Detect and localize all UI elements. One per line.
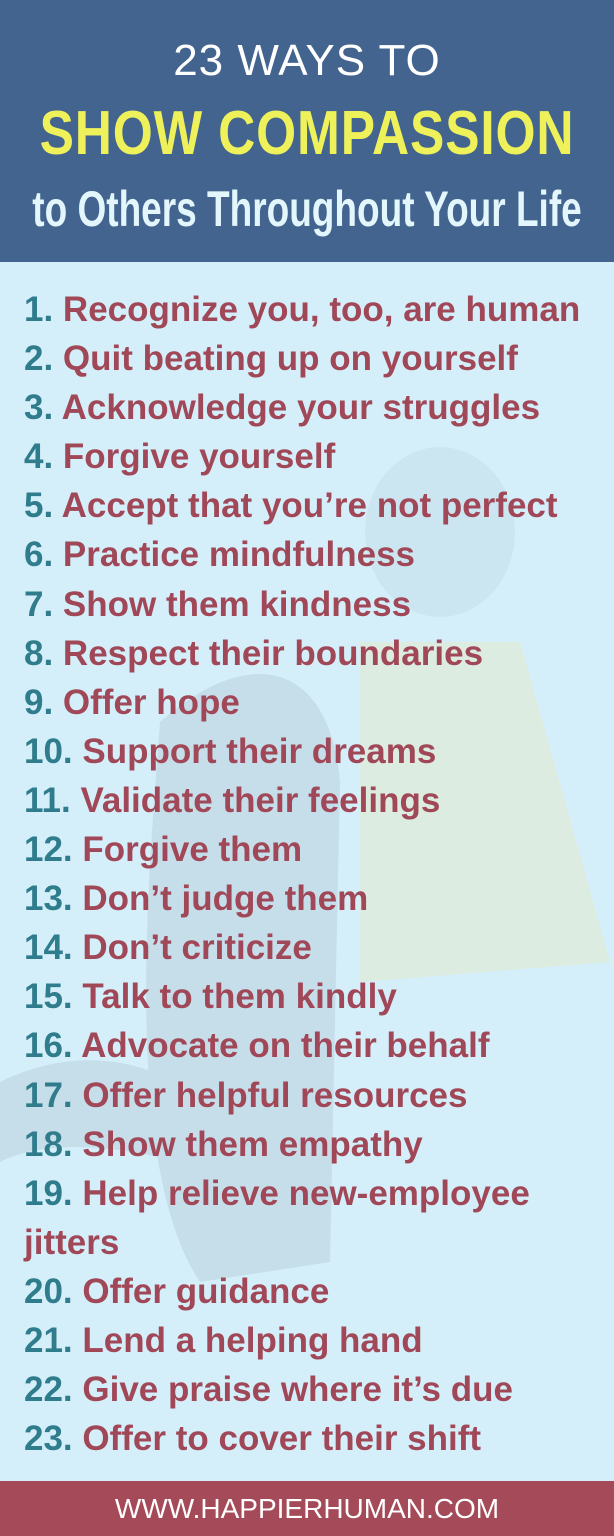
list of 23 ways: 1. Recognize you, too, are human [24, 290, 580, 329]
list of 23 ways: 13. Don’t judge them [24, 879, 368, 918]
list of 23 ways: 11. Validate their feelings [24, 781, 440, 820]
list of 23 ways: 16. Advocate on their behalf [24, 1026, 489, 1065]
list of 23 ways: 4. Forgive yourself [24, 437, 335, 476]
list of 23 ways: 9. Offer hope [24, 683, 240, 722]
list of 23 ways: 19. Help relieve new-employee [24, 1174, 530, 1213]
list of 23 ways: 6. Practice mindfulness [24, 535, 415, 574]
list of 23 ways: 5. Accept that you’re not perfect [24, 486, 558, 525]
list of 23 ways: 23. Offer to cover their shift [24, 1419, 481, 1458]
title line 1: 23 WAYS TO [173, 36, 441, 85]
footer: WWW.HAPPIERHUMAN.COM [115, 1493, 499, 1524]
list of 23 ways: 21. Lend a helping hand [24, 1321, 423, 1360]
list of 23 ways: 20. Offer guidance [24, 1272, 329, 1311]
list of 23 ways: 17. Offer helpful resources [24, 1076, 467, 1114]
list of 23 ways: 10. Support their dreams [24, 732, 436, 771]
list of 23 ways: 22. Give praise where it’s due [24, 1370, 513, 1409]
header [0, 0, 614, 262]
list of 23 ways: 3. Acknowledge your struggles [24, 388, 540, 427]
list of 23 ways: 12. Forgive them [24, 830, 302, 869]
title line 3: to Others Throughout Your Life [32, 181, 582, 237]
list of 23 ways: 7. Show them kindness [24, 585, 411, 624]
list of 23 ways [23, 290, 580, 1458]
title line 2: SHOW COMPASSION [40, 99, 574, 168]
background illustration [0, 447, 610, 1282]
list of 23 ways: 15. Talk to them kindly [24, 977, 397, 1016]
list of 23 ways: 8. Respect their boundaries [24, 634, 483, 673]
footer [0, 1481, 614, 1536]
list of 23 ways: 2. Quit beating up on yourself [24, 339, 518, 378]
list of 23 ways: jitters [24, 1223, 119, 1262]
list of 23 ways: 14. Don’t criticize [24, 928, 312, 967]
list of 23 ways: 18. Show them empathy [24, 1125, 423, 1164]
